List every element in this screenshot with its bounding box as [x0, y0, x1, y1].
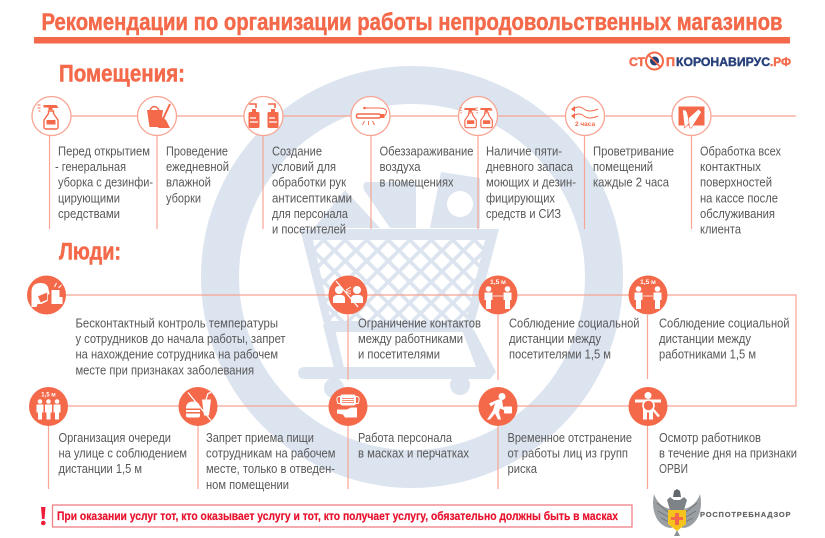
text: five-day supply: фицирующих — [486, 192, 556, 206]
text: general cleaning: цирующими — [58, 192, 120, 206]
text: daily inspection: Осмотр работников — [659, 431, 761, 445]
icon: bucket and mop — [138, 96, 176, 136]
icon: limiting contact — [328, 276, 368, 314]
heading: people: Люди: — [59, 238, 121, 266]
text: contact surfaces: контактных — [700, 160, 762, 174]
text: air disinfection — [380, 144, 474, 190]
text: worker distance: дистанции между — [659, 332, 752, 346]
text: contact surfaces — [700, 144, 782, 236]
text: contact surfaces: обслуживания — [700, 207, 775, 221]
text: no eating at workplace: Запрет приема пищи — [206, 431, 314, 445]
text: limiting contacts — [358, 316, 481, 362]
logo: stopcoronavirus: .РФ — [770, 55, 791, 69]
text: daily inspection: в течение дня на признаки — [659, 446, 797, 460]
text: risk group removal: риска — [508, 462, 537, 476]
text: no eating at workplace: сотрудникам на рабочем — [206, 446, 336, 460]
text: no eating at workplace: месте, только в отведен- — [206, 462, 335, 476]
text: general cleaning — [55, 144, 153, 221]
text: hand sanitising conditions — [272, 144, 352, 236]
text: contact surfaces: клиента — [700, 222, 741, 236]
text: hand sanitising conditions: Создание — [272, 144, 322, 158]
text: hand sanitising conditions: и посетителей — [272, 222, 346, 236]
text: worker distance: Соблюдение социальной — [659, 316, 790, 330]
icon: UV lamp — [351, 96, 390, 136]
text: daily wet cleaning: ежедневной — [166, 160, 229, 174]
text: hand sanitising conditions: для персонала — [272, 207, 348, 221]
icon: ventilation every 2 hours: 2 часа — [575, 121, 595, 128]
text: risk group removal — [508, 431, 632, 476]
text: limiting contacts: и посетителями — [358, 348, 440, 362]
text: air disinfection: в помещениях — [380, 176, 454, 190]
icon: ventilation every 2 hours — [566, 96, 604, 136]
text: temperature control: у сотрудников до начала работы, запрет — [76, 332, 286, 346]
text: five-day supply — [486, 144, 576, 221]
text: daily wet cleaning: влажной — [166, 176, 211, 190]
text: risk group removal: Временное отстранение — [508, 431, 632, 445]
text: limiting contacts: Ограничение контактов — [358, 316, 481, 330]
text: daily wet cleaning: уборки — [166, 192, 201, 206]
logo: stopcoronavirus: СТ — [629, 55, 646, 69]
icon: distance between visitors — [478, 276, 518, 314]
text: masks and gloves: Работа персонала — [358, 431, 452, 445]
text: five-day supply: моющих и дезин- — [486, 176, 576, 190]
text: visitor distance — [509, 316, 640, 362]
text: daily wet cleaning — [166, 144, 229, 206]
text: five-day supply: дневного запаса — [486, 160, 573, 174]
text: no eating at workplace — [206, 431, 336, 492]
text: daily inspection: ОРВИ — [659, 462, 688, 476]
text: ventilation: помещений — [593, 160, 653, 174]
background: shopping cart emblem — [220, 85, 604, 469]
heading: premises: Помещения: — [59, 60, 185, 88]
text: ventilation: каждые 2 часа — [593, 176, 669, 190]
text: queue organisation: на улице с соблюдением — [58, 446, 187, 460]
text: queue organisation — [58, 431, 187, 476]
text: daily inspection — [659, 431, 797, 476]
text: general cleaning: - генеральная — [55, 160, 126, 174]
text: worker distance — [659, 316, 790, 362]
text: air disinfection: Обеззараживание — [380, 144, 474, 158]
text: visitor distance: дистанции между — [509, 332, 602, 346]
panel: premises timeline — [32, 96, 796, 236]
icon: contactless temperature check — [27, 276, 66, 314]
text: general cleaning: уборка с дезинфи- — [58, 176, 153, 190]
logo: rospotrebnadzor wordmark: РОСПОТРЕБНАДЗОР — [700, 510, 790, 519]
text: hand sanitising conditions: обработки рук — [272, 176, 346, 190]
text: five-day supply: Наличие пяти- — [486, 144, 562, 158]
text: ventilation — [593, 144, 674, 190]
text: queue organisation: дистанции 1,5 м — [58, 462, 142, 476]
icon: exclamation mark — [41, 507, 46, 525]
text: limiting contacts: между работниками — [358, 332, 463, 346]
callout: masks required — [52, 505, 632, 527]
icon: double spray bottles — [458, 96, 498, 136]
logo: stopcoronavirus: П — [666, 55, 675, 69]
icon: body inspection with magnifier — [628, 387, 668, 426]
icon: queue with distance: 1,5 м — [41, 392, 56, 398]
text: temperature control: месте при признаках заболевания — [76, 364, 254, 378]
callout: masks required: При оказании услуг тот, кто оказывает услугу и тот, кто получает услугу, обязательно должны быть в масках — [57, 509, 618, 523]
text: hand sanitising conditions: условий для — [272, 160, 336, 174]
text: no eating at workplace: ном помещении — [206, 478, 289, 492]
text: general cleaning: средствами — [58, 207, 120, 221]
icon: person carrying case — [478, 387, 518, 426]
text: ventilation: Проветривание — [593, 144, 674, 158]
icon: distance between workers — [628, 276, 668, 314]
text: daily wet cleaning: Проведение — [166, 144, 228, 158]
icon: mask and gloves — [328, 387, 368, 426]
text: visitor distance: Соблюдение социальной — [509, 316, 640, 330]
icon: no food — [178, 387, 218, 426]
text: worker distance: работниками 1,5 м — [659, 348, 756, 362]
text: temperature control: Бесконтактный контроль температуры — [76, 316, 278, 330]
icon: queue with distance — [29, 387, 68, 426]
text: air disinfection: воздуха — [380, 160, 421, 174]
icon: wiping surfaces — [672, 96, 711, 136]
icon: hand sanitizer dispensers — [244, 96, 283, 136]
panel: people timeline — [27, 276, 797, 492]
text: risk group removal: от работы лиц из групп — [508, 446, 628, 460]
logo: rospotrebnadzor emblem — [653, 489, 701, 536]
logo: stopcoronavirus — [629, 52, 791, 70]
text: queue organisation: Организация очереди — [58, 431, 171, 445]
text: contact surfaces: поверхностей — [700, 176, 772, 190]
text: masks and gloves: в масках и перчатках — [358, 446, 470, 460]
icon: spray bottle — [32, 96, 71, 136]
text: general cleaning: Перед открытием — [58, 144, 150, 158]
text: hand sanitising conditions: антисептиками — [272, 192, 352, 206]
text: contact surfaces: Обработка всех — [700, 144, 782, 158]
text: temperature control: на нахождение сотрудника на рабочем — [76, 348, 278, 362]
text: visitor distance: посетителями 1,5 м — [509, 348, 611, 362]
text: temperature control — [76, 316, 286, 378]
text: masks and gloves — [358, 431, 470, 460]
text: contact surfaces: на кассе после — [700, 192, 778, 206]
text: five-day supply: средств и СИЗ — [486, 207, 561, 221]
logo: stopcoronavirus: КОРОНАВИРУС — [676, 55, 770, 69]
